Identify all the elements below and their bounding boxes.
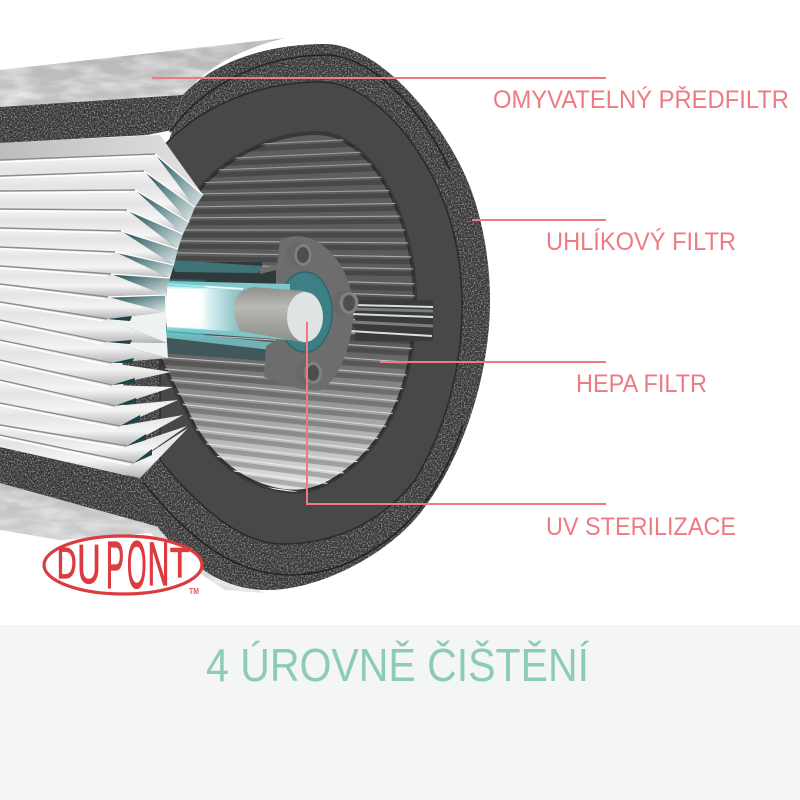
carbon foam band, bottom [0, 447, 170, 530]
DuPont logo: U [77, 533, 101, 595]
pointer line: HEPA filter [380, 361, 606, 363]
label: carbon filter: UHLÍKOVÝ FILTR [546, 227, 736, 256]
DuPont logo [44, 527, 202, 603]
UV lamp glowing tube [158, 280, 290, 340]
bolt, right [332, 291, 358, 315]
bright inner rods [350, 300, 433, 341]
inner pleats seen through the opening [150, 133, 420, 514]
label: UV sterilization: UV STERILIZACE [546, 513, 736, 541]
DuPont logo: D [57, 538, 76, 588]
carbon foam band, top [0, 95, 183, 143]
foam end ring [120, 44, 490, 590]
pointer line: carbon filter [472, 219, 606, 221]
pointer line: UV sterilization [307, 322, 606, 504]
DuPont logo: P [106, 528, 124, 602]
DuPont logo: T [170, 539, 190, 586]
dark housing above the lamp [146, 262, 290, 284]
lamp end cap [287, 292, 323, 342]
HEPA pleats, cut face [0, 135, 203, 478]
teal housing strip below the lamp [158, 331, 280, 351]
lamp mounting plate [259, 236, 353, 390]
label: HEPA filter: HEPA FILTR [576, 370, 707, 398]
outer washable prefilter sheet, bottom [0, 482, 265, 593]
lamp cylinder [234, 287, 305, 343]
label: prefilter: OMYVATELNÝ PŘEDFILTR [493, 85, 789, 114]
foam layer seam, bottom [143, 425, 463, 575]
dark housing below the lamp [147, 335, 272, 361]
illustration: filter cutaway [0, 38, 490, 593]
foam layer seam, top [170, 55, 450, 170]
teal housing strip above the lamp [172, 260, 262, 273]
DuPont logo: O [127, 527, 146, 603]
DuPont logo: N [148, 530, 169, 599]
dark gasket ring [160, 82, 462, 544]
title: 4 ÚROVNĚ ČIŠTĚNÍ [206, 639, 589, 691]
outer washable prefilter sheet, top [0, 38, 285, 107]
bolt, bottom [296, 361, 322, 385]
pointer line: prefilter [152, 77, 606, 79]
teal collar around the lamp end [278, 272, 332, 352]
DuPont logo: TM [189, 587, 199, 596]
bottom band [0, 625, 800, 800]
bolt, top [286, 243, 312, 267]
